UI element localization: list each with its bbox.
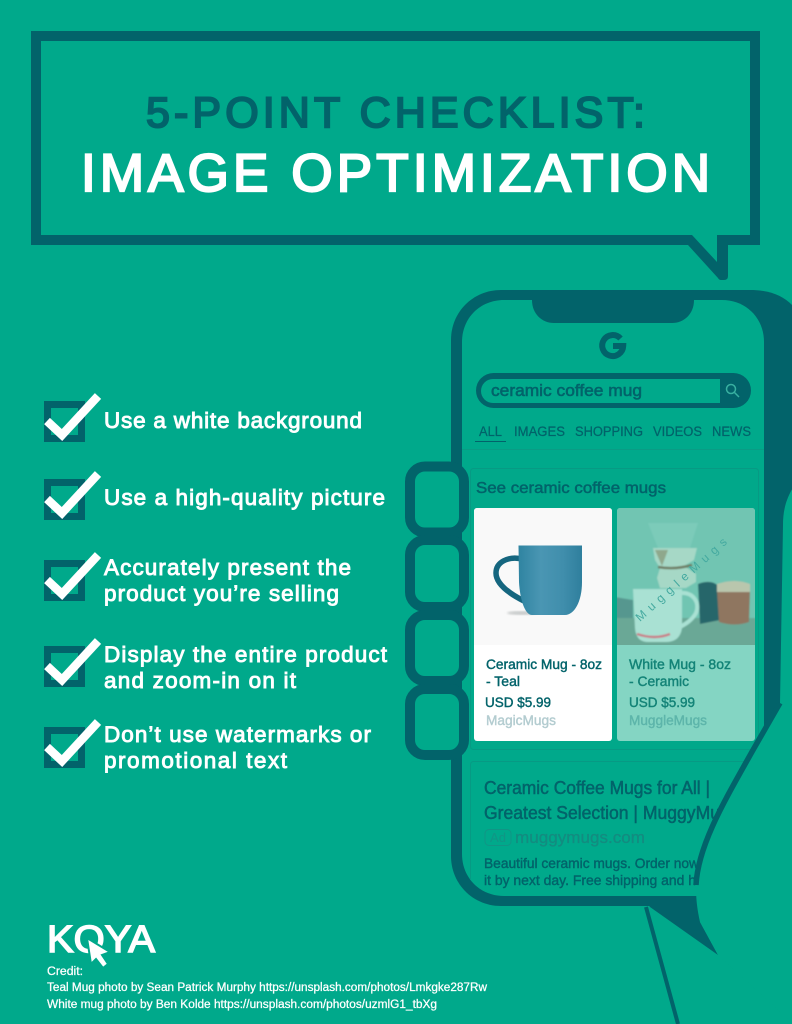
panel: ad result: Beautiful ceramic mugs. Order now [484, 855, 700, 871]
item 3: Accurately present the [104, 555, 351, 580]
item 5: Don’t use watermarks or [104, 722, 372, 747]
product card: white mug [615, 506, 757, 741]
panel: ad result: Greatest Selection | MuggyMu [484, 803, 720, 823]
ad badge: Ad [490, 831, 506, 845]
heading: 5-point checklist: 5-POINT CHECKLIST: [146, 89, 645, 137]
watermarked photo [615, 506, 757, 647]
hand outline [696, 703, 780, 885]
phone screen [462, 300, 764, 896]
fingers [410, 466, 464, 755]
product card: teal mug: Ceramic Mug - 8oz [486, 657, 602, 672]
ad badge [485, 830, 511, 846]
search tabs: VIDEOS [653, 424, 702, 439]
item 3 [47, 555, 351, 606]
item 3: product you’re selling [104, 581, 339, 606]
heading: image optimization: IMAGE OPTIMIZATION [81, 144, 710, 203]
credits [47, 966, 488, 1011]
speech bubble title [31, 31, 760, 280]
item 1: Use a white background [104, 408, 362, 433]
search bar [476, 373, 751, 408]
credits: Credit: [47, 966, 83, 978]
notch [532, 300, 694, 323]
phone bottom speech tail [646, 902, 718, 955]
product card: white mug: - Ceramic [629, 674, 689, 689]
search tabs: ALL [479, 424, 502, 439]
icon: google G [602, 335, 623, 356]
item 4 [47, 641, 388, 693]
search tabs: IMAGES [514, 424, 565, 439]
product card: teal mug: MagicMugs [486, 713, 556, 728]
phone in hand [410, 290, 792, 1024]
item 2: Use a high-quality picture [104, 485, 385, 510]
search tabs [475, 424, 751, 442]
credits: Teal Mug photo by Sean Patrick Murphy https://unsplash.com/photos/Lmkgke287Rw [47, 982, 488, 994]
product card: white mug: MuggleMugs [629, 713, 707, 728]
watermarked photo: MuggleMugs [633, 535, 730, 624]
item 5 [47, 722, 372, 773]
icon: cursor [87, 938, 110, 968]
item 4: and zoom-in on it [104, 668, 297, 693]
search tabs: NEWS [712, 424, 751, 439]
icon: magnifier [726, 384, 739, 397]
search tabs: SHOPPING [575, 424, 643, 439]
search bar: ceramic coffee mug [491, 381, 642, 400]
item 2 [47, 474, 385, 516]
product card: white mug: White Mug - 8oz [629, 657, 731, 672]
product card: teal mug: - Teal [486, 674, 520, 689]
product card: white mug: USD $5.99 [629, 695, 695, 710]
panel: ad result [470, 762, 758, 888]
panel: ad result: muggymugs.com [515, 828, 645, 847]
teal mug photo [496, 546, 582, 615]
product card: teal mug: USD $5.99 [485, 695, 551, 710]
phone body [451, 290, 792, 906]
credits: White mug photo by Ben Kolde https://unsplash.com/photos/uzmlG1_tbXg [47, 999, 437, 1011]
panel: shopping results [470, 468, 758, 750]
item 1 [47, 396, 362, 438]
item 5: promotional text [104, 748, 288, 773]
logo: KOYA: KOYA [47, 919, 156, 961]
panel: shopping results: See ceramic coffee mugs [476, 480, 666, 497]
panel: ad result: Ceramic Coffee Mugs for All | [484, 778, 710, 798]
product card: teal mug [474, 508, 612, 741]
item 4: Display the entire product [104, 642, 388, 667]
wrist line [646, 907, 678, 1024]
checklist [47, 396, 388, 773]
hand [696, 478, 792, 1024]
panel: ad result: it by next day. Free shipping and h [484, 872, 696, 888]
